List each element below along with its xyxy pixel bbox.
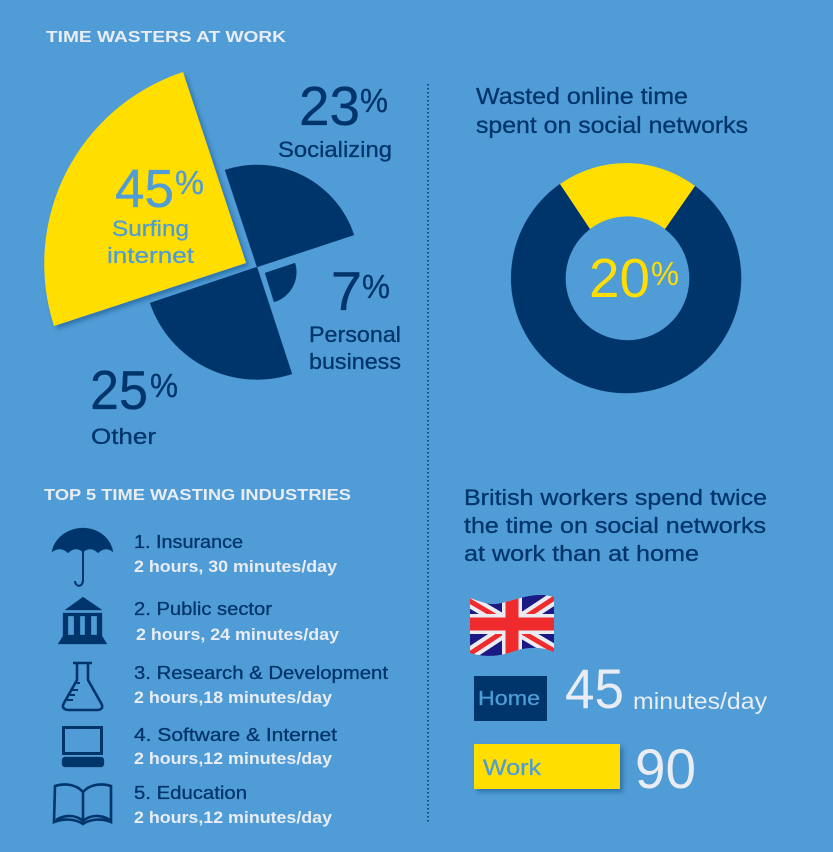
label: 7% personal business: Personal <box>309 322 401 347</box>
list item: insurance: 1. Insurance <box>134 532 243 552</box>
bar: work <box>474 744 620 789</box>
value: 45 minutes/day <box>565 657 768 720</box>
list item: insurance <box>134 532 338 576</box>
donut chart: 20% <box>511 163 741 393</box>
label: 7% personal business: 7 <box>331 260 362 322</box>
bar: work: Work <box>483 755 542 780</box>
label: 7% personal business: business <box>309 349 401 374</box>
ring: remainder <box>511 184 741 393</box>
label: 7% personal business <box>309 260 401 374</box>
label: 23% socializing <box>278 75 392 162</box>
label: 45% surfing internet: Surfing <box>112 216 189 241</box>
icon: bank building <box>58 597 107 644</box>
label: 25% other: Other <box>91 424 156 449</box>
list item: public sector <box>134 599 340 644</box>
pie chart: time wasters <box>44 72 354 380</box>
label: 23% socializing: % <box>360 82 388 119</box>
list item: public sector: 2 hours, 24 minutes/day <box>136 626 340 644</box>
text block: british workers: the time on social networks <box>464 513 766 538</box>
donut value: % <box>651 255 679 292</box>
slice: socializing <box>225 165 354 267</box>
list item: software and internet: 2 hours,12 minutes/day <box>134 750 333 768</box>
icon: UK flag <box>470 595 554 656</box>
donut value: 20 <box>589 247 650 309</box>
heading: top 5 time wasting industries: TOP 5 TIME WASTING INDUSTRIES <box>44 487 351 504</box>
slice: other <box>150 267 292 380</box>
heading: time wasters at work: TIME WASTERS AT WORK <box>46 29 287 46</box>
label: 23% socializing: Socializing <box>278 137 392 162</box>
list item: public sector: 2. Public sector <box>134 599 272 619</box>
list item: education <box>134 783 333 827</box>
heading: wasted online time: spent on social networks <box>476 112 748 138</box>
list item: research and development: 2 hours,18 minutes/day <box>134 689 333 707</box>
value: 45 minutes/day: minutes/day <box>633 688 768 714</box>
list item: software and internet: 4. Software & Internet <box>134 725 337 745</box>
list item: software and internet <box>134 725 337 768</box>
label: 25% other: 25 <box>90 359 148 421</box>
label: 25% other <box>90 359 178 449</box>
label: 45% surfing internet: internet <box>107 243 194 268</box>
text block: british workers <box>464 485 767 566</box>
heading: wasted online time <box>476 83 748 138</box>
label: 45% surfing internet: % <box>175 164 204 201</box>
heading: wasted online time: Wasted online time <box>476 83 688 109</box>
list item: research and development <box>134 663 388 707</box>
value: 45 minutes/day: 45 <box>565 657 624 720</box>
icon: computer <box>62 728 104 767</box>
label: 25% other: % <box>150 367 178 404</box>
slice: surfing internet <box>44 72 246 326</box>
icon: umbrella <box>52 528 113 586</box>
icon: open book <box>54 784 111 824</box>
bar: home: Home <box>478 687 540 710</box>
label: 23% socializing: 23 <box>299 75 360 137</box>
slice: personal business <box>265 263 296 302</box>
bar: home <box>474 676 547 721</box>
divider <box>427 84 429 824</box>
list item: education: 2 hours,12 minutes/day <box>134 809 333 827</box>
text block: british workers: at work than at home <box>464 541 699 566</box>
ring: 20% segment <box>560 163 695 229</box>
donut value <box>589 247 679 309</box>
icon: flask <box>63 663 102 710</box>
list item: insurance: 2 hours, 30 minutes/day <box>134 558 338 576</box>
label: 45% surfing internet <box>107 159 204 268</box>
list item: research and development: 3. Research & Development <box>134 663 388 683</box>
label: 45% surfing internet: 45 <box>115 159 174 219</box>
text block: british workers: British workers spend twice <box>464 485 767 510</box>
value: 90: 90 <box>635 737 696 800</box>
list item: education: 5. Education <box>134 783 247 803</box>
label: 7% personal business: % <box>362 268 390 305</box>
